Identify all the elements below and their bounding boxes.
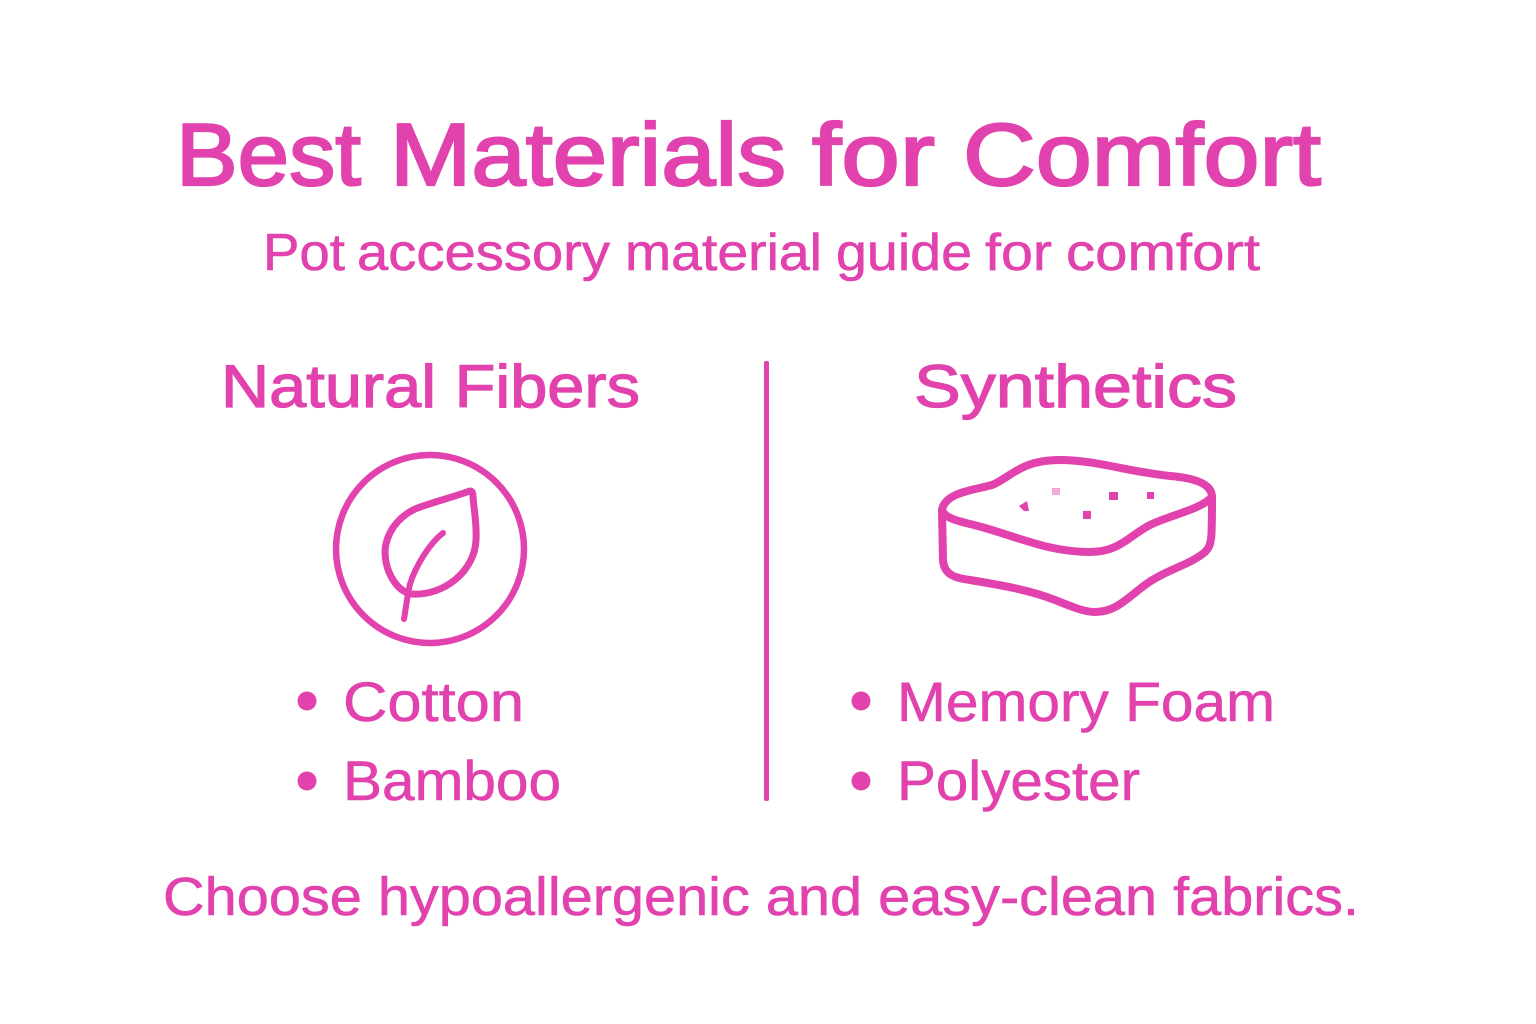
center divider bbox=[764, 361, 769, 801]
icon: foam block bbox=[942, 460, 1212, 612]
title bbox=[176, 105, 1321, 204]
list: natural fibers bbox=[298, 670, 561, 812]
subtitle: for bbox=[985, 224, 1052, 282]
list: natural fibers: Cotton bbox=[343, 670, 524, 733]
title: Best bbox=[176, 105, 361, 204]
subtitle: comfort bbox=[1066, 224, 1261, 282]
footer note: Choose hypoallergenic and easy-clean fabrics. bbox=[163, 867, 1359, 927]
heading: natural fibers: Natural Fibers bbox=[221, 353, 640, 420]
subtitle: guide bbox=[836, 224, 972, 282]
subtitle: Pot bbox=[263, 224, 346, 282]
subtitle bbox=[263, 224, 1261, 282]
panel: natural fibers bbox=[221, 353, 640, 812]
list: synthetics bbox=[852, 670, 1275, 812]
title: for bbox=[812, 105, 935, 204]
list: synthetics: Memory Foam bbox=[897, 670, 1275, 733]
panel: synthetics bbox=[852, 353, 1275, 812]
icon: foam pores bbox=[1019, 488, 1154, 519]
icon: leaf in circle bbox=[336, 455, 524, 643]
list: natural fibers: Bamboo bbox=[343, 749, 561, 812]
list: synthetics: Polyester bbox=[897, 749, 1140, 812]
title: Materials bbox=[390, 105, 786, 204]
heading: synthetics: Synthetics bbox=[914, 353, 1237, 420]
subtitle: material bbox=[625, 224, 822, 282]
title: Comfort bbox=[963, 105, 1321, 204]
subtitle: accessory bbox=[357, 224, 610, 282]
